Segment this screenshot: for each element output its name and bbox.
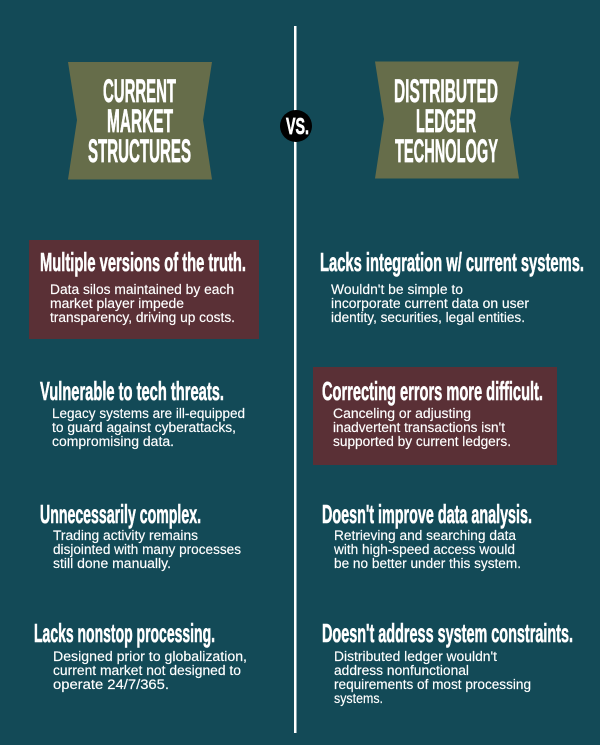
text block: vulnerable to tech threats: compromising data. [52,434,174,449]
callout: correcting errors more difficult: supported by current ledgers. [333,434,511,449]
text block: doesn't address system constraints: systems. [334,691,383,706]
text block: doesn't improve data analysis: be no better under this system. [334,556,521,571]
text block: lacks integration: incorporate current data on user [331,296,530,311]
text block: vulnerable to tech threats: Legacy systems are ill-equipped [52,406,245,421]
text block: doesn't address system constraints: Distributed ledger wouldn't [334,649,497,664]
callout: correcting errors more difficult [313,367,557,465]
text block: lacks integration: identity, securities, legal entities. [331,310,525,325]
text block: lacks nonstop processing: current market not designed to [53,663,241,678]
banner: distributed ledger technology [375,62,519,178]
callout: multiple versions of the truth: Data silos maintained by each [50,282,234,297]
badge: vs. [280,110,312,142]
callout: multiple versions of the truth: market player impede [50,296,184,311]
text block: unnecessarily complex [40,499,241,571]
callout: multiple versions of the truth: transparency, driving up costs. [50,310,235,325]
text block: lacks nonstop processing: operate 24/7/365. [53,677,169,692]
badge: vs.: VS. [286,113,309,139]
callout: correcting errors more difficult: Canceling or adjusting [333,406,471,421]
text block: vulnerable to tech threats: to guard against cyberattacks, [52,420,236,435]
text block: unnecessarily complex: disjointed with many processes [53,542,241,557]
text block: vulnerable to tech threats: Vulnerable to tech threats. [40,376,224,406]
text block: lacks integration: Wouldn't be simple to [331,282,463,297]
text block: doesn't address system constraints: address nonfunctional [334,663,469,678]
callout: multiple versions of the truth [29,240,259,339]
text block: doesn't improve data analysis: with high-speed access would [333,542,515,557]
panel: distributed ledger technology column [313,62,584,706]
panel: current market structures column [29,62,259,692]
text block: doesn't improve data analysis [322,499,532,571]
text block: unnecessarily complex: Unnecessarily complex. [40,499,201,529]
banner: current market structures: CURRENT [103,73,176,109]
text block: lacks integration [320,247,584,325]
banner: current market structures [68,62,212,180]
banner: current market structures: STRUCTURES [88,133,191,169]
banner: current market structures: MARKET [107,103,173,139]
banner: distributed ledger technology: LEDGER [416,103,476,139]
text block: doesn't address system constraints [322,618,573,706]
text block: vulnerable to tech threats [40,376,245,449]
text block: lacks nonstop processing [34,618,247,692]
text block: unnecessarily complex: still done manually. [53,556,171,571]
callout: multiple versions of the truth: Multiple versions of the truth. [40,247,246,277]
text block: lacks nonstop processing: Designed prior to globalization, [53,649,247,664]
callout: correcting errors more difficult: inadvertent transactions isn't [333,420,505,435]
text block: doesn't improve data analysis: Retrieving and searching data [334,528,516,543]
text block: doesn't address system constraints: requirements of most processing [334,677,531,692]
text block: lacks nonstop processing: Lacks nonstop processing. [34,618,215,648]
text block: unnecessarily complex: Trading activity remains [53,528,198,543]
